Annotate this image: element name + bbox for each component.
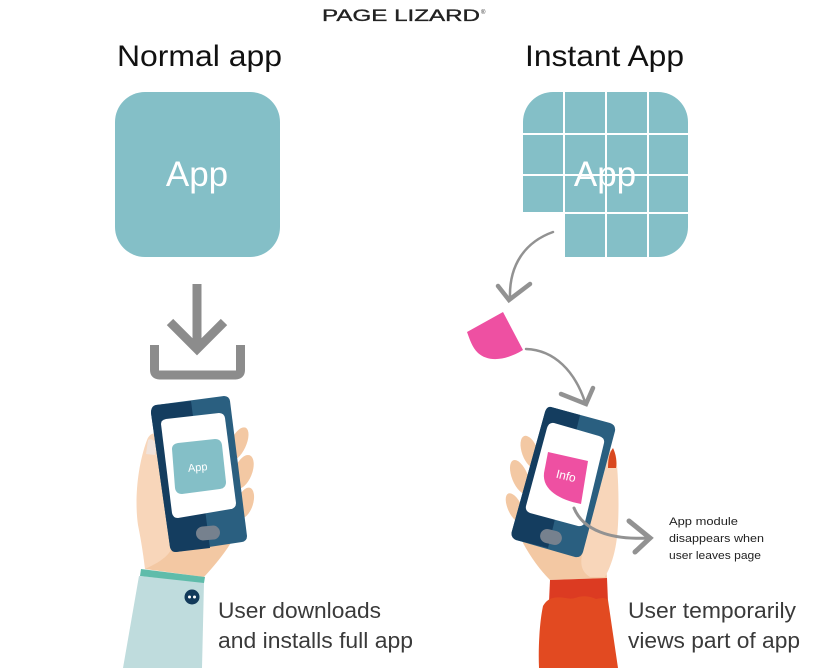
info label: Info [555, 467, 578, 485]
caption: instant app: views part of app [628, 628, 800, 653]
fingers [223, 424, 258, 521]
cuff [549, 578, 608, 602]
heading: normal app: Normal app [117, 40, 282, 73]
illustration: left hand holding phone [123, 396, 258, 668]
phone body [512, 407, 615, 557]
phone screen [161, 413, 236, 518]
sleeve [123, 576, 204, 668]
annotation: module disappears: user leaves page [669, 550, 761, 562]
arrow: module to phone [526, 349, 593, 404]
annotation: module disappears: App module [669, 516, 738, 528]
icon: pink app module [467, 312, 523, 359]
fingers [502, 433, 543, 525]
illustration: right hand holding phone [502, 407, 618, 668]
caption: instant app [628, 598, 800, 653]
phone screen [526, 423, 604, 526]
annotation: module disappears [669, 516, 764, 562]
thumb [581, 450, 618, 577]
cuff button [184, 590, 200, 604]
pink info module [544, 452, 588, 504]
caption: instant app: User temporarily [628, 598, 796, 623]
logo: ® [481, 9, 486, 16]
caption: normal app: and installs full app [218, 628, 413, 653]
caption: normal app: User downloads [218, 598, 381, 623]
icon: instant app modular tile: App [574, 155, 636, 194]
arrow: module disappears [574, 508, 650, 552]
caption: normal app [218, 598, 413, 653]
arrow: module leaves tile [498, 232, 553, 300]
heading: instant app: Instant App [525, 40, 684, 73]
home button [539, 528, 563, 546]
app label: App [187, 461, 208, 475]
icon: instant app modular tile [523, 92, 688, 257]
home button [195, 525, 221, 541]
nail [608, 448, 616, 468]
phone body [151, 396, 247, 552]
icon: normal app tile: App [166, 155, 228, 194]
annotation: module disappears: disappears when [669, 533, 764, 545]
palm [145, 430, 240, 577]
sleeve [539, 596, 618, 668]
icon: download arrow [154, 284, 240, 375]
app tile on screen [172, 439, 226, 494]
logo: PAGE LIZARD [322, 6, 480, 25]
cuff [140, 569, 205, 583]
logo [322, 6, 486, 25]
icon: normal app tile [115, 92, 280, 257]
thumb side [137, 433, 172, 569]
palm [515, 470, 607, 580]
